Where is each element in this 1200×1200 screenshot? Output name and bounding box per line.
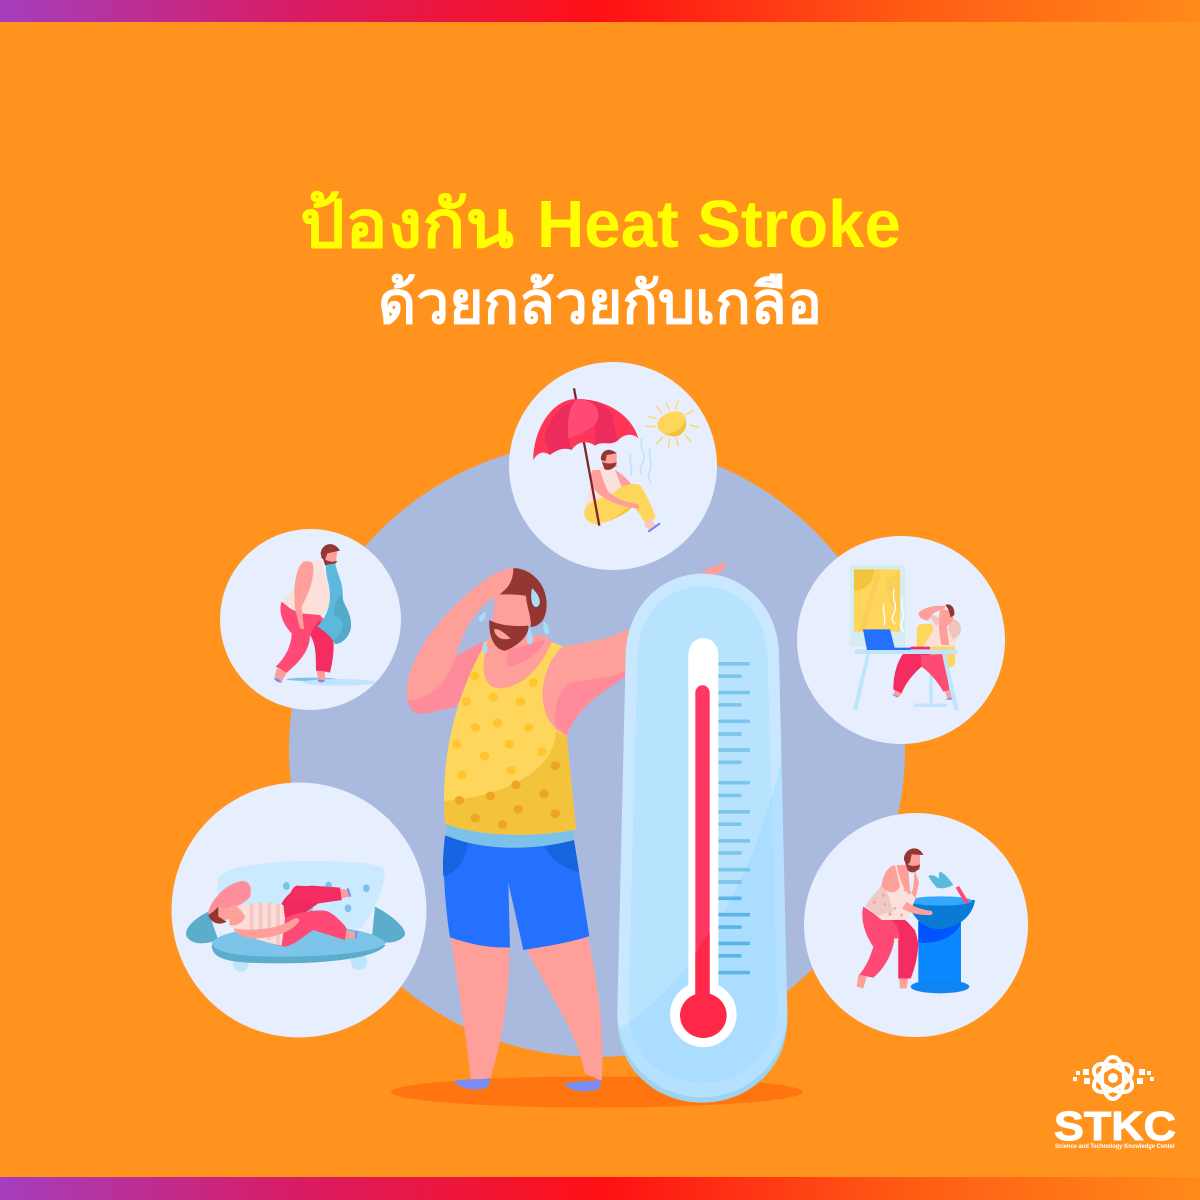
title: ป้องกัน xyxy=(300,187,514,261)
heat waves xyxy=(630,438,651,482)
logo atom icon xyxy=(1073,1057,1154,1099)
thermometer tube xyxy=(670,638,737,1047)
panel: man at hot desk xyxy=(797,536,1005,744)
sun xyxy=(646,401,698,447)
lying man xyxy=(208,881,357,947)
ground shadow xyxy=(391,1076,803,1108)
sofa xyxy=(186,861,405,972)
vomit stream xyxy=(317,563,351,644)
panel: man vomiting xyxy=(220,529,401,710)
panel: umbrella in the sun xyxy=(509,362,717,570)
raised arm xyxy=(407,568,514,714)
large background circle xyxy=(289,441,905,1057)
head xyxy=(489,568,547,651)
thermometer xyxy=(613,574,793,1114)
main figure: man holding thermometer xyxy=(407,563,793,1114)
logo wordmark: STKC xyxy=(1054,1103,1176,1149)
top gradient bar xyxy=(0,0,1200,22)
man with hand on head xyxy=(891,604,961,700)
puddle xyxy=(287,678,376,686)
panel: man at water fountain xyxy=(804,813,1028,1037)
logo: STKC xyxy=(1054,1057,1176,1150)
tank top xyxy=(444,639,576,835)
water fountain xyxy=(907,872,975,993)
heat lines xyxy=(883,589,904,631)
waistband xyxy=(446,825,574,848)
drinking man xyxy=(857,848,933,988)
sweat drops xyxy=(479,588,549,654)
neck and chest xyxy=(484,635,552,688)
title: Heat Stroke xyxy=(537,187,901,262)
outstretched arm xyxy=(543,563,725,735)
shorts xyxy=(443,835,589,950)
laptop xyxy=(863,629,911,650)
bottom gradient bar xyxy=(0,1177,1200,1200)
desk xyxy=(853,649,959,710)
sitting man xyxy=(584,450,660,532)
window xyxy=(850,565,905,647)
title: ด้วยกล้วยกับเกลือ xyxy=(378,271,822,336)
chair xyxy=(914,624,955,707)
umbrella xyxy=(533,388,638,526)
panel: man lying on sofa xyxy=(172,782,426,1038)
shoes xyxy=(453,1078,601,1091)
title xyxy=(300,187,901,336)
legs xyxy=(450,932,602,1081)
logo tagline: Science and Technology Knowledge Center xyxy=(1055,1143,1175,1150)
scale ticks xyxy=(718,662,750,974)
bending man xyxy=(274,544,340,682)
